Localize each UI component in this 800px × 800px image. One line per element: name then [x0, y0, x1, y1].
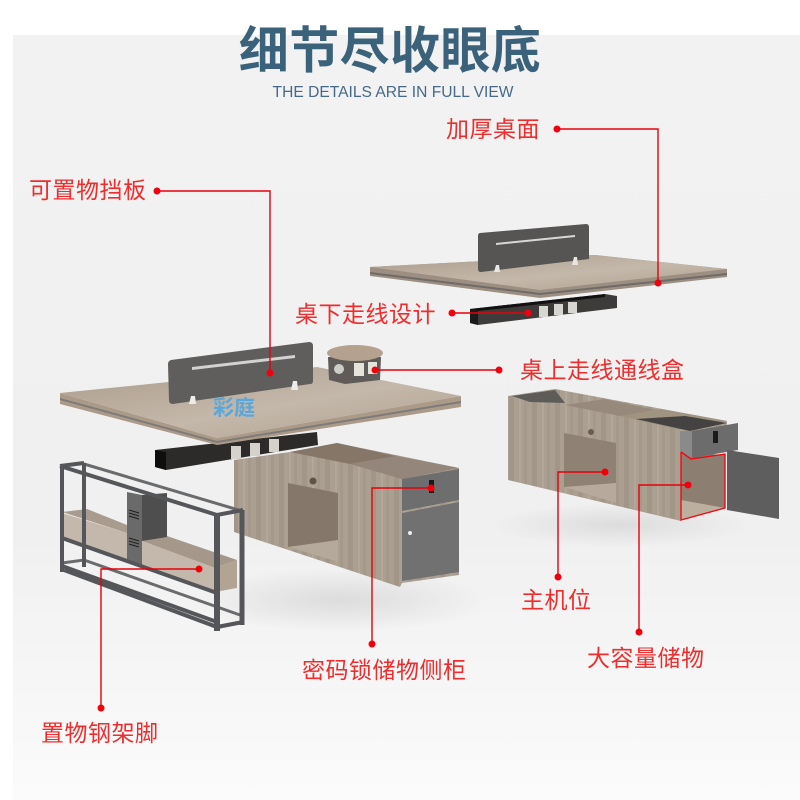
title: 细节尽收眼底 [239, 23, 541, 79]
upper cable tray [470, 294, 617, 325]
right shelf box [142, 536, 237, 568]
callout: 主机位 [521, 468, 608, 613]
main cable tray [155, 432, 318, 470]
callout: 加厚桌面 [446, 116, 662, 286]
callout: 桌上走线通线盒: 桌上走线通线盒 [520, 357, 684, 383]
cabinet open compartments [290, 443, 396, 464]
main desktop [60, 367, 461, 445]
callout: 可置物挡板: 可置物挡板 [29, 177, 146, 203]
callout: 密码锁储物侧柜: 密码锁储物侧柜 [302, 657, 466, 683]
callout: 可置物挡板 [29, 177, 274, 376]
callout: 密码锁储物侧柜 [302, 484, 466, 683]
open compartment [681, 452, 725, 520]
callout: 置物钢架脚 [41, 566, 202, 746]
left shelf box [62, 509, 127, 533]
main divider panel [168, 342, 313, 404]
front rails and posts [60, 463, 243, 627]
red compartment outline [681, 452, 725, 520]
cable box [327, 345, 383, 384]
callout: 桌上走线通线盒 [372, 357, 684, 383]
callout: 桌下走线设计 [295, 301, 532, 327]
callout: 置物钢架脚: 置物钢架脚 [41, 720, 158, 746]
centre post [127, 492, 142, 565]
watermark: 彩庭 [213, 396, 255, 420]
subtitle: THE DETAILS ARE IN FULL VIEW [273, 84, 514, 101]
upper divider panel [478, 224, 589, 272]
callout: 大容量储物 [587, 482, 704, 671]
right cabinet [508, 389, 779, 521]
callout: 加厚桌面: 加厚桌面 [446, 116, 540, 142]
cabinet grey door and drawer [402, 469, 459, 581]
open door [727, 450, 779, 519]
main desk cabinet [234, 443, 459, 587]
back rails [62, 464, 242, 615]
callout: 桌下走线设计: 桌下走线设计 [295, 301, 436, 327]
open drawer [692, 423, 738, 458]
upper desktop with divider panel [370, 224, 727, 298]
callout: 主机位: 主机位 [521, 587, 592, 613]
steel frame leg with shelves [60, 463, 243, 631]
callout: 大容量储物: 大容量储物 [587, 645, 704, 671]
